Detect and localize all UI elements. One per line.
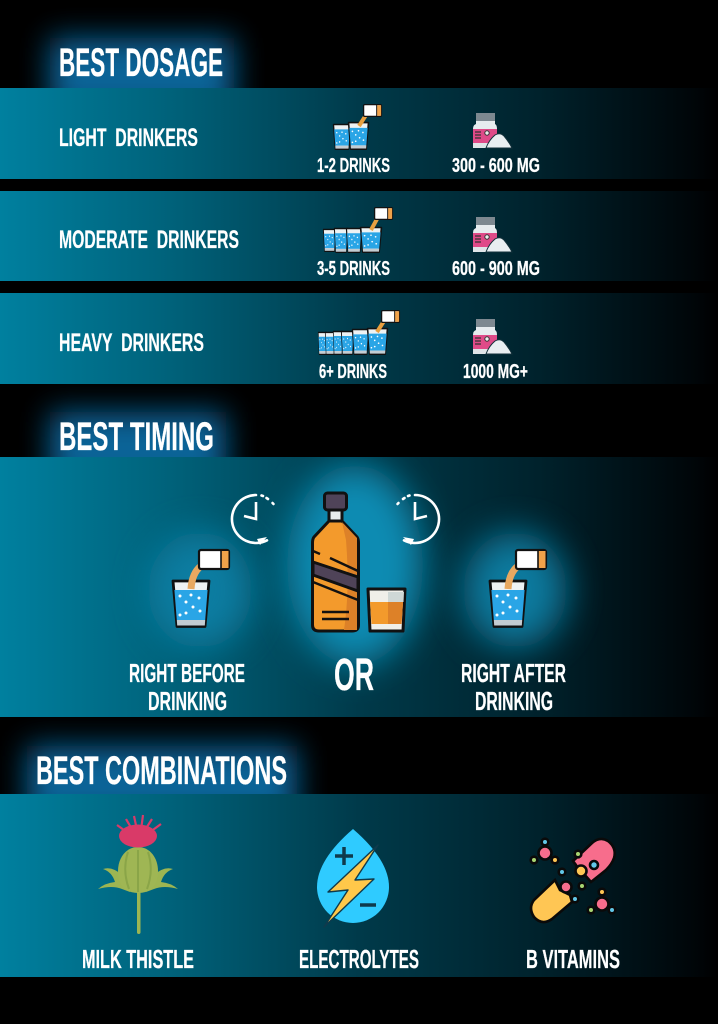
label: right before drinking: DRINKING: [148, 686, 227, 716]
label: 300-600 mg: 300 - 600 MG: [452, 155, 540, 177]
icon: b vitamins capsule: [531, 839, 615, 922]
icon: whisky shot glass: [368, 589, 405, 631]
icon: supplement bottle: [473, 319, 512, 354]
label: right before drinking: RIGHT BEFORE: [129, 658, 245, 688]
label: right after drinking: RIGHT AFTER: [461, 658, 566, 688]
panel: best timing: [0, 457, 718, 717]
icon: milk thistle: [98, 815, 178, 934]
row label: light drinkers: LIGHT DRINKERS: [59, 124, 198, 152]
heading: best timing: BEST TIMING: [59, 415, 214, 459]
label: right after drinking: [461, 658, 566, 716]
label: 1-2 drinks: 1-2 DRINKS: [317, 155, 390, 177]
glow behind timing icons: [148, 465, 567, 665]
row label: moderate drinkers: MODERATE DRINKERS: [59, 226, 239, 254]
icon: pouring glass left: [173, 550, 229, 626]
icon: electrolyte drop: [317, 829, 389, 927]
panel: best combinations: [0, 794, 718, 977]
heading: best combinations: BEST COMBINATIONS: [36, 749, 287, 793]
icon: four glasses: [323, 208, 392, 252]
icon: clock left: [232, 495, 274, 545]
icon: whisky bottle: [312, 493, 358, 631]
heading: best dosage: BEST DOSAGE: [59, 41, 223, 85]
row label: heavy drinkers: HEAVY DRINKERS: [59, 329, 204, 357]
icon: six glasses: [318, 311, 399, 354]
label: or: OR: [334, 649, 374, 700]
icon: pouring glass right: [490, 550, 546, 626]
label: 6+ drinks: 6+ DRINKS: [319, 361, 387, 383]
panel: light drinkers: [0, 88, 718, 179]
heading glow: combinations: [27, 746, 297, 822]
heading glow: dosage: [50, 38, 234, 114]
panel: moderate drinkers: [0, 191, 718, 281]
label: b vitamins: B VITAMINS: [526, 944, 620, 974]
label: 1000 mg+: 1000 MG+: [463, 361, 528, 383]
icon: supplement bottle: [473, 113, 512, 148]
panel: heavy drinkers: [0, 293, 718, 384]
icon: supplement bottle: [473, 217, 512, 252]
label: right before drinking: [129, 658, 245, 716]
icon: two glasses: [333, 105, 381, 149]
label: 600-900 mg: 600 - 900 MG: [452, 258, 540, 280]
heading glow: timing: [50, 412, 226, 488]
label: milk thistle: MILK THISTLE: [82, 944, 194, 974]
icon: clock right: [398, 495, 439, 545]
label: 3-5 drinks: 3-5 DRINKS: [317, 258, 390, 280]
label: right after drinking: DRINKING: [475, 686, 553, 716]
label: electrolytes: ELECTROLYTES: [299, 944, 419, 974]
